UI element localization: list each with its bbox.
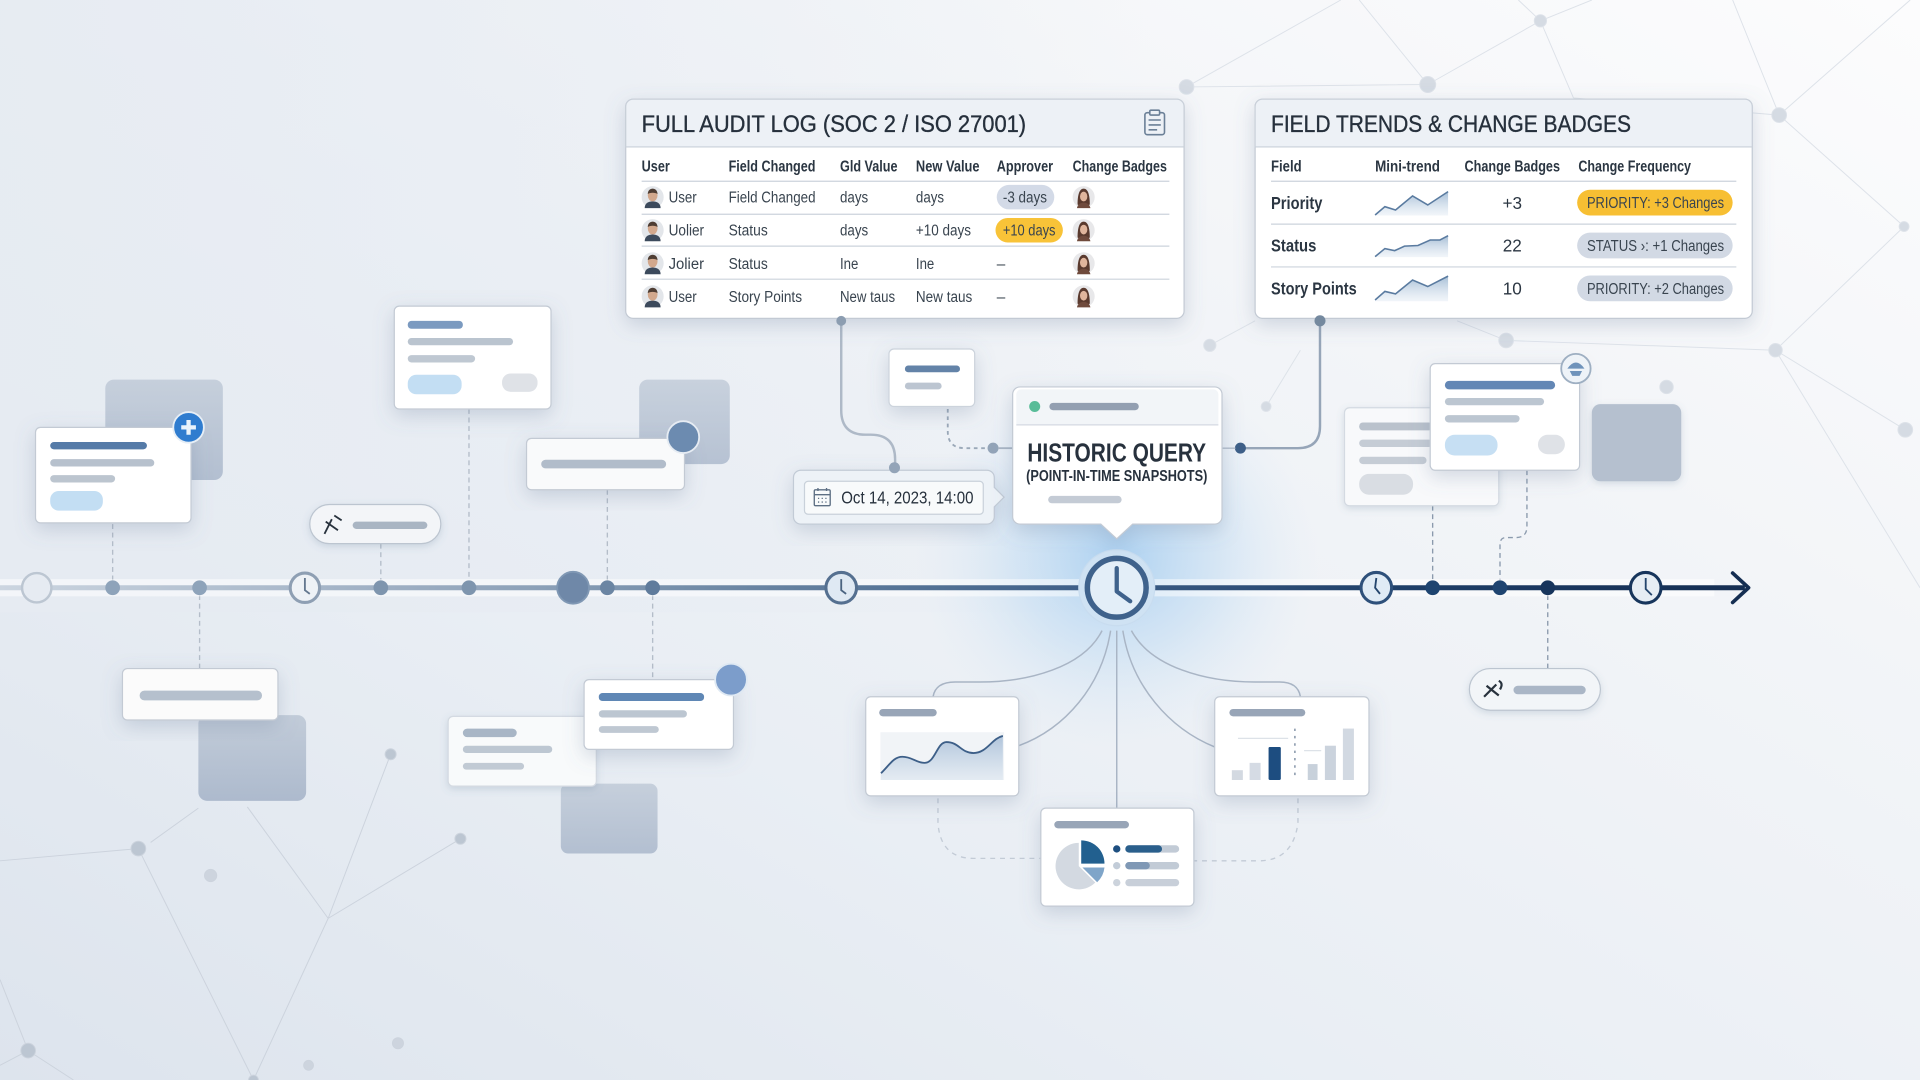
icon: edit mark [1484,681,1502,697]
table row 1: User [669,190,697,207]
pill tag left [310,504,441,544]
trend row: priority [1271,190,1733,216]
trends header row: Change Badges [1464,158,1560,175]
card C [527,421,699,490]
panel: full audit log [626,99,1184,318]
background network: bottom left [0,749,466,1080]
card E [584,664,747,749]
table row 2 [642,218,1095,242]
table row 2: Uolier [669,223,704,240]
table row 3: Jolier [669,256,704,273]
timeline large node [557,572,589,604]
backing square right [1592,404,1681,481]
table row 2: +10 days [1003,223,1056,240]
clock node 1 [290,573,320,602]
connector: field trends to historic query [1240,321,1320,448]
fan connectors from central clock [933,631,1300,808]
panel: line chart [866,697,1019,796]
trend row: story points: PRIORITY: +2 Changes [1587,281,1724,298]
connector pin: date chip [889,462,900,473]
clock node 4 [1630,572,1661,603]
table row 3: Ine [840,256,858,273]
date text: Oct 14, 2023, 14:00 [841,487,973,507]
table row 4: New taus [916,289,973,306]
date picker chip [793,470,1004,524]
table header row: Approver [997,158,1053,175]
table header row: New Value [916,158,980,175]
pie [1056,840,1104,889]
table header row: Change Badges [1073,158,1167,175]
timeline arrow head [1733,573,1749,602]
trends header row: Field [1271,158,1302,175]
table row 1: Field Changed [729,190,816,207]
card H (rear right) [1344,408,1499,506]
table row 1: days [840,190,868,207]
heading: audit log: FULL AUDIT LOG (SOC 2 / ISO 27001) [642,111,1026,138]
panel: pie chart [1041,808,1194,906]
card F [448,716,596,786]
trend row: status: 22 [1503,236,1522,256]
table header row: Field Changed [729,158,816,175]
icon: calendar [814,488,830,506]
dashed drop lines to timeline [113,409,1548,677]
table row 4: Story Points [729,289,802,306]
table row 1: -3 days [1003,190,1047,207]
pie legend [1113,845,1179,886]
trend row: status: STATUS ›: +1 Changes [1587,238,1724,255]
callout: historic query [1013,387,1222,539]
table header row [642,158,1167,175]
table row 1 [642,185,1095,209]
panel: field trends [1255,99,1752,318]
historic query subtitle: (POINT-IN-TIME SNAPSHOTS) [1026,468,1207,485]
card B [394,306,551,409]
trends header row: Change Frequency [1578,158,1691,175]
backing square: left card A [105,380,223,480]
table row 1: days [916,190,944,207]
trend row: status: Status [1271,236,1316,256]
connector: small card to historic query [948,409,994,448]
card D [122,669,278,720]
trends header row: Mini-trend [1375,158,1440,175]
badge: plus [173,412,204,443]
pill tag right [1469,669,1600,710]
connector dots beside historic query [988,443,1246,454]
timeline dots [105,580,1555,595]
table row 3: – [997,256,1006,273]
badge: circle [667,421,699,453]
backing square: card D [198,715,306,801]
trend row: priority: +3 [1502,193,1522,213]
status dot [1029,401,1040,412]
heading: field trends: FIELD TRENDS & CHANGE BADGES [1271,111,1631,138]
trend row: priority: PRIORITY: +3 Changes [1587,195,1724,212]
icon: edit mark [324,516,342,534]
panel: bar chart [1215,697,1369,796]
trend row: priority: Priority [1271,193,1323,213]
table row 4: – [997,289,1006,306]
timeline start node [22,573,51,602]
table row 4 [642,285,1095,307]
clock node 2 [826,572,857,603]
trend row: story points: Story Points [1271,278,1357,298]
backing square: card C [639,380,730,464]
trend row: story points [1271,276,1733,301]
table header row: Gld Value [840,158,898,175]
card G (front right) [1430,354,1591,470]
connector pin: field trends [1314,315,1326,326]
background network: top right [1179,0,1920,588]
trend row: story points: 10 [1503,278,1522,298]
clock node 3 [1361,572,1392,603]
trends header row [1271,158,1691,175]
table row 2: +10 days [916,223,971,240]
timeline [0,550,1749,626]
icon: clipboard [1145,110,1164,135]
central clock [1079,550,1155,626]
connector pin: audit log [836,316,846,326]
table header row: User [642,158,670,175]
table row 3: Ine [916,256,934,273]
central blue glow [915,367,1319,747]
table row 4: User [669,289,697,306]
small card above date chip [889,349,975,407]
table row 2: Status [729,223,768,240]
table row 3: Status [729,256,768,273]
table row 2: days [840,223,868,240]
badge: circle [715,664,747,696]
backing square: cards E and F [561,784,658,853]
trend row: status [1271,233,1733,258]
table row 3 [642,252,1095,274]
connector: audit log to date chip [841,321,895,468]
card A [36,412,204,523]
badge: shield [1561,354,1591,383]
table row 4: New taus [840,289,895,306]
historic query title: HISTORIC QUERY [1027,440,1206,468]
dashed links to pie card [938,798,1298,861]
